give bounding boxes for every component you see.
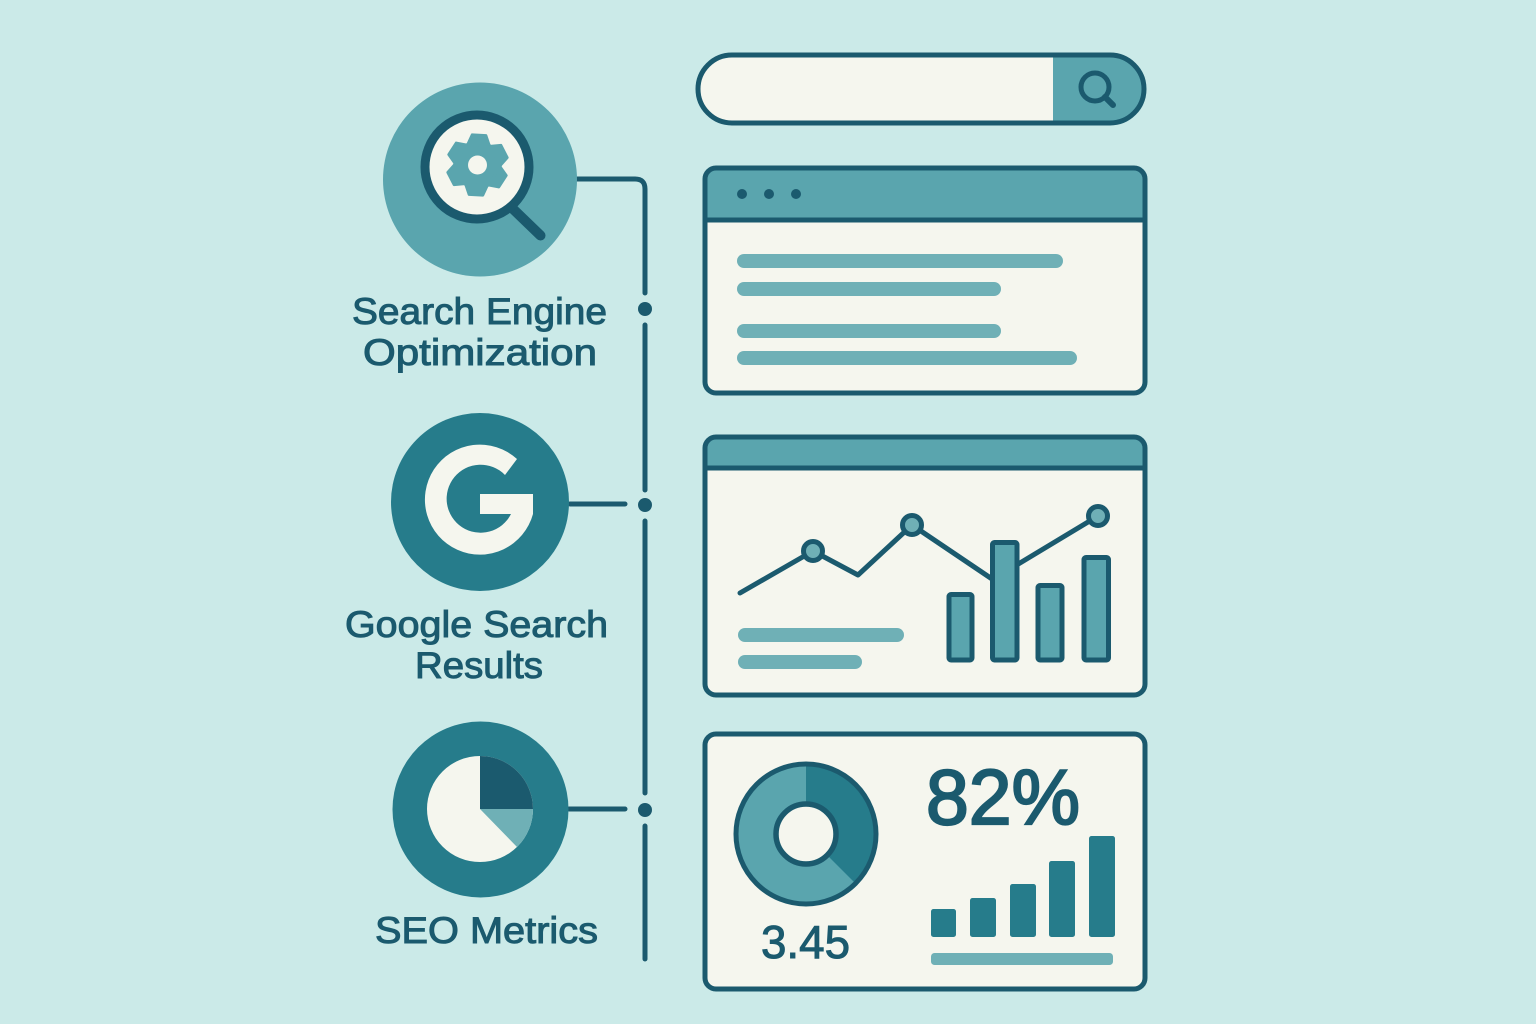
label: Search Engine Optimization: Search Engine — [352, 291, 607, 332]
panel: metrics — [705, 734, 1145, 989]
line chart — [740, 506, 1108, 593]
icon: Google G — [391, 413, 569, 591]
bar chart — [931, 836, 1115, 937]
caption lines — [738, 628, 904, 669]
value: 3.45: 3.45 — [761, 916, 850, 968]
panel: analytics chart window — [705, 437, 1145, 695]
label: Search Engine Optimization: Optimization — [363, 332, 597, 373]
icon: pie chart — [392, 722, 568, 898]
icon: search button magnifier — [1081, 73, 1113, 105]
window dots — [737, 189, 801, 199]
value: 82%: 82% — [926, 753, 1080, 841]
label: Google Search Results — [345, 604, 608, 686]
panel: browser results page — [705, 168, 1145, 393]
label: Google Search Results: Results — [415, 645, 543, 686]
label: Google Search Results: Google Search — [345, 604, 608, 645]
bar chart — [949, 542, 1108, 660]
search bar — [698, 55, 1144, 123]
bar chart baseline — [931, 953, 1113, 965]
label: SEO Metrics: SEO Metrics — [375, 910, 598, 951]
donut chart — [736, 764, 876, 904]
result lines — [737, 254, 1077, 365]
connector timeline — [569, 179, 652, 959]
label: Search Engine Optimization — [352, 291, 607, 373]
icon: magnifier with gear — [383, 82, 577, 276]
